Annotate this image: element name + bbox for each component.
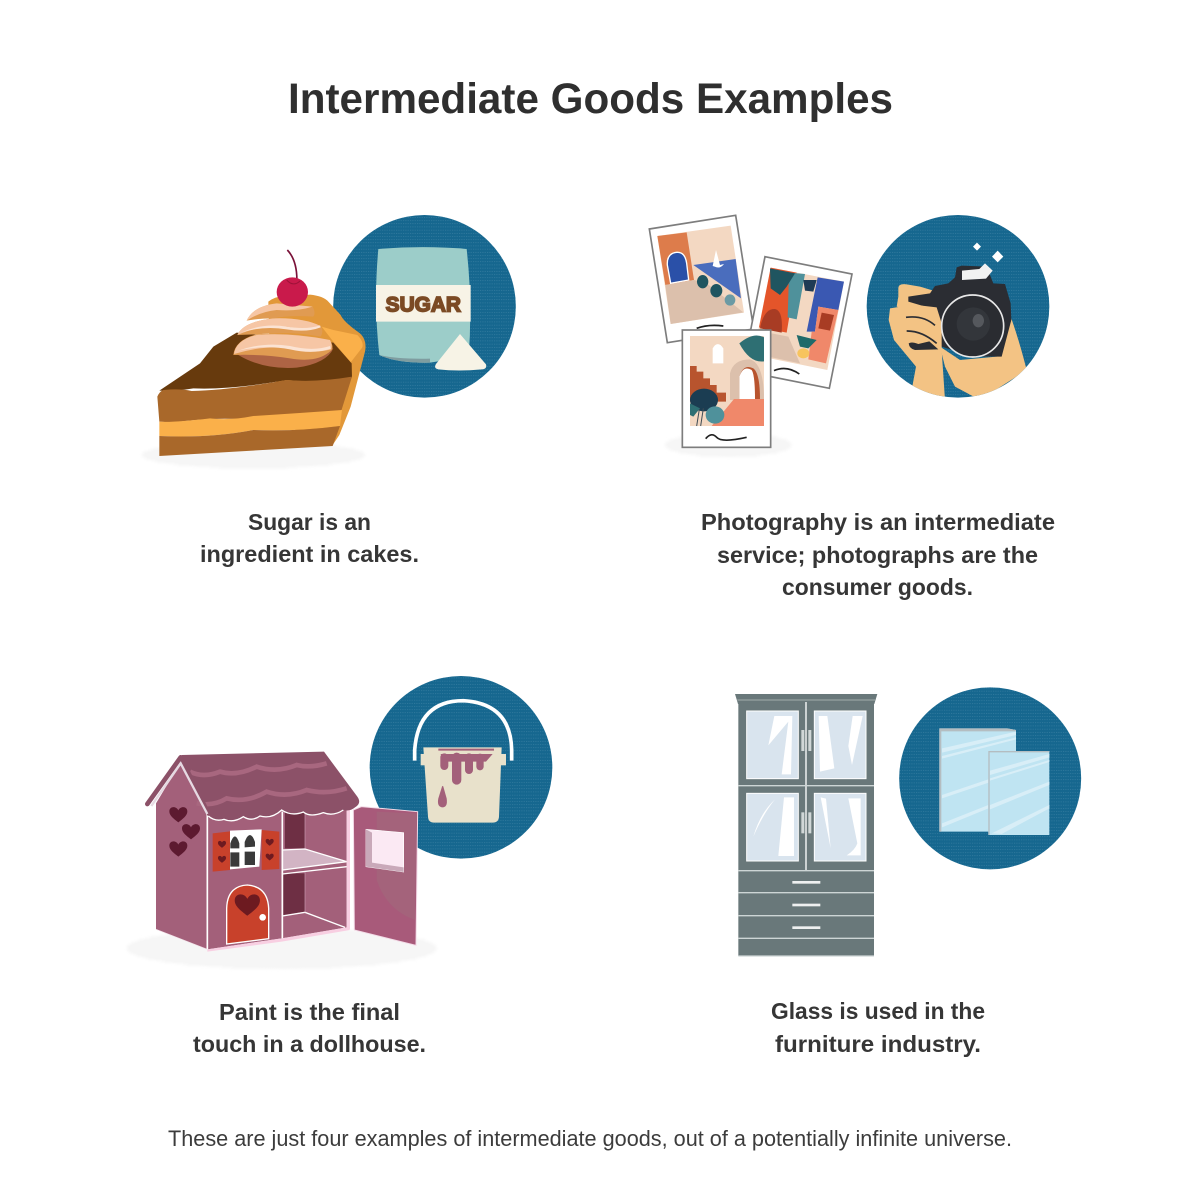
icon: cake slice (157, 250, 366, 456)
footer note: These are just four examples of intermediate goods, out of a potentially infinite universe. (168, 1126, 1012, 1151)
icon: cabinet (735, 694, 877, 956)
caption: sugar (200, 509, 419, 567)
illustration: cake and sugar (142, 215, 516, 468)
caption: photography: Photography is an intermediate (701, 509, 1055, 535)
photo shadow (665, 433, 792, 457)
cherry (287, 250, 297, 286)
title: Intermediate Goods Examples (288, 75, 893, 123)
illustration: paint and dollhouse (127, 676, 552, 969)
caption: photography: consumer goods. (782, 574, 973, 600)
panel: photography (649, 215, 1055, 600)
caption: sugar: ingredient in cakes. (200, 541, 419, 567)
caption: photography (701, 509, 1055, 600)
whipped cream (233, 303, 333, 368)
hands and camera (889, 263, 1027, 400)
caption: paint: Paint is the final (219, 999, 400, 1025)
panel: glass and furniture (735, 687, 1081, 1057)
sparkles (973, 243, 1003, 262)
caption: glass (771, 998, 985, 1057)
caption: photography: service; photographs are the (717, 542, 1038, 568)
ground shadow (127, 928, 437, 969)
left wall (156, 763, 207, 949)
icon: paint circle (370, 676, 552, 859)
caption: glass: Glass is used in the (771, 998, 985, 1024)
panel: sugar and cake (142, 215, 516, 567)
open side panel (353, 807, 418, 945)
panel: paint and dollhouse (127, 676, 552, 1057)
caption: glass: furniture industry. (775, 1031, 981, 1057)
caption: paint (193, 999, 426, 1057)
polaroid: France (649, 215, 754, 343)
icon: sugar circle: SUGAR (386, 293, 461, 317)
polaroid: Morocco (682, 330, 771, 447)
polaroid: Italy (743, 257, 852, 388)
illustration: photos and camera (649, 215, 1049, 457)
door (227, 885, 269, 944)
front wall (207, 810, 282, 949)
roof (182, 752, 359, 821)
icon: dollhouse (147, 752, 418, 952)
icon: glass circle (899, 687, 1081, 869)
window and shutters (213, 830, 279, 872)
illustration: cabinet and glass (735, 687, 1081, 956)
caption: sugar: Sugar is an (248, 509, 371, 535)
interior (282, 810, 347, 938)
caption: paint: touch in a dollhouse. (193, 1031, 426, 1057)
icon: camera circle (867, 215, 1049, 400)
icon: sugar circle (333, 215, 516, 398)
side hearts (169, 807, 200, 857)
cake shadow (142, 442, 365, 468)
